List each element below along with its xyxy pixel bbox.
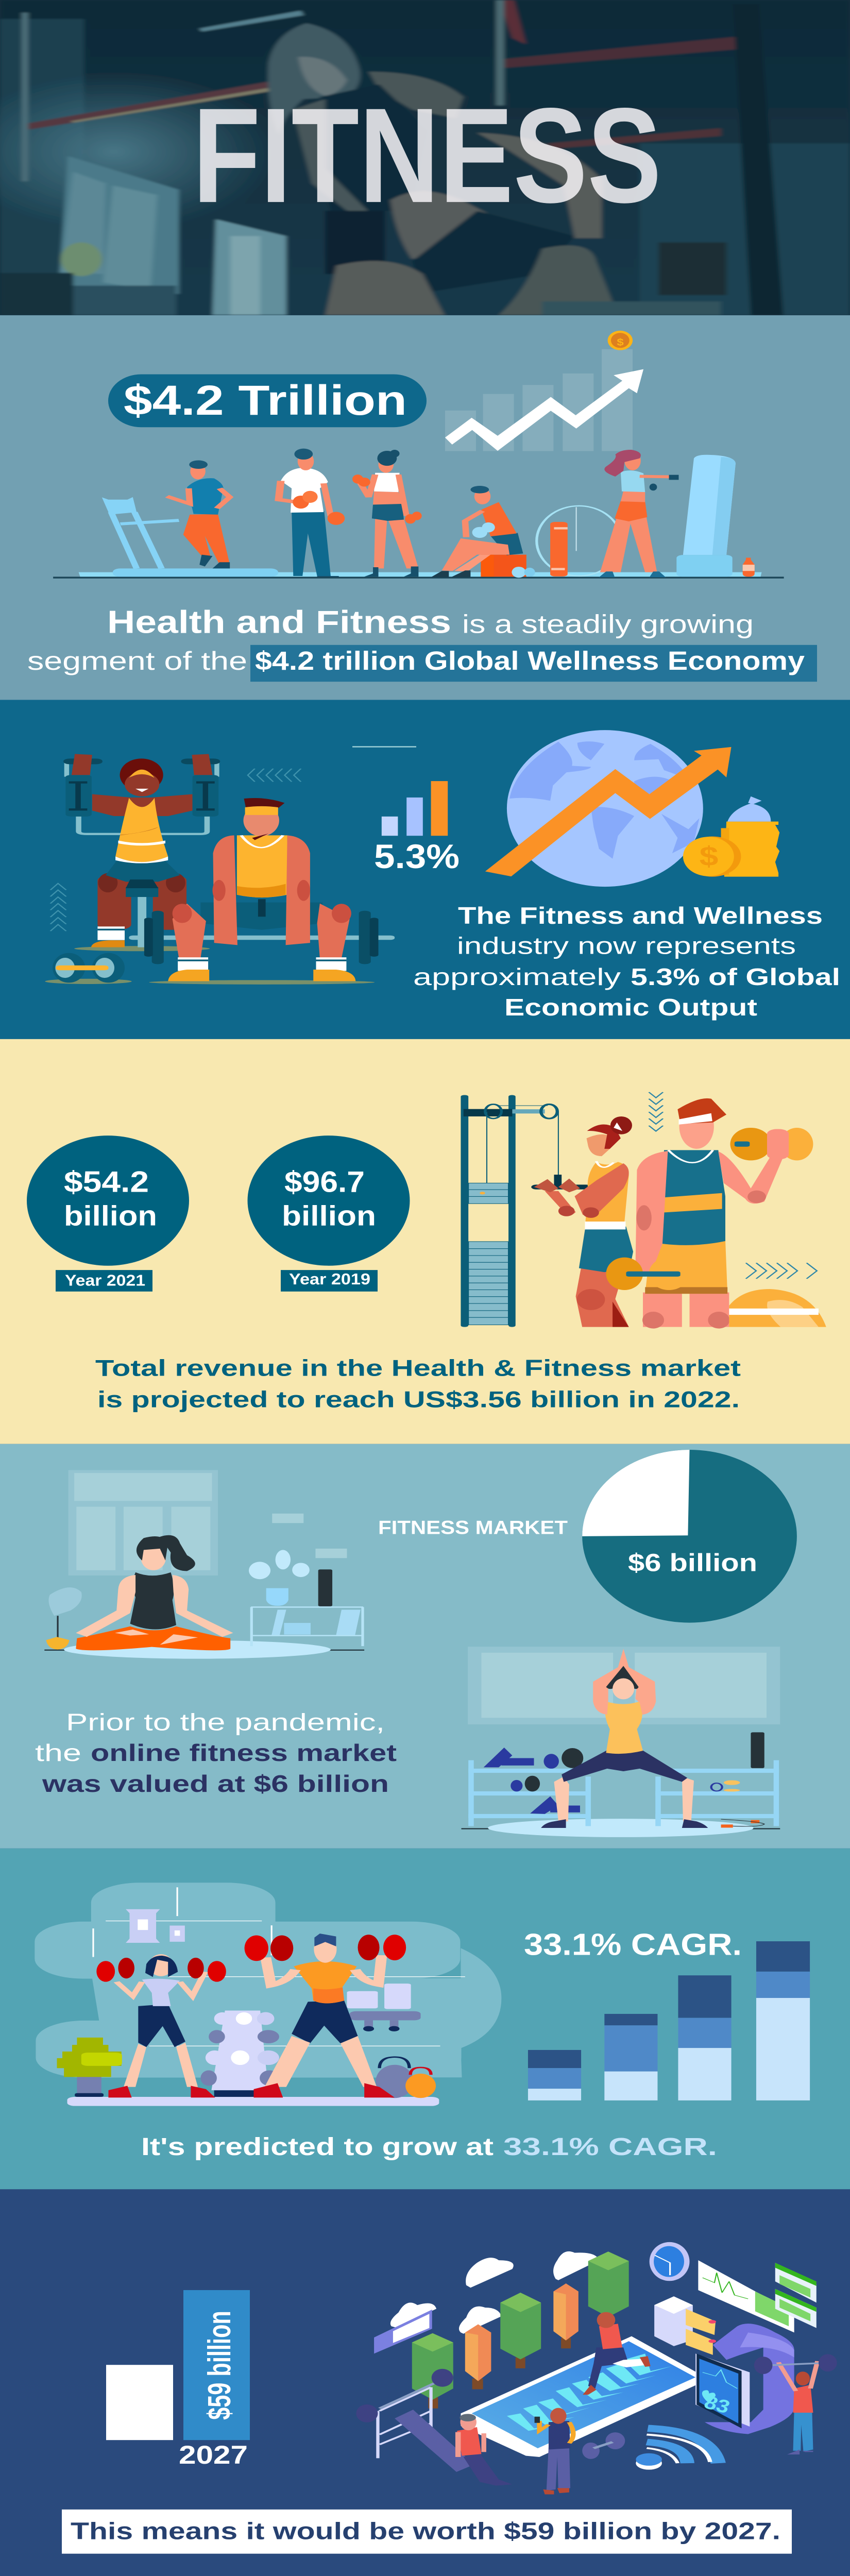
bar chart icon <box>382 781 448 836</box>
treadmill <box>111 512 179 568</box>
runner <box>183 514 230 565</box>
statement text: Economic Output <box>504 994 757 1021</box>
shelves <box>468 1760 779 1826</box>
statement text: approximately <box>413 963 621 990</box>
exercise ball <box>729 1289 826 1327</box>
bar: 59 billion in 2027 <box>183 2290 250 2440</box>
wifi symbol <box>647 2428 718 2463</box>
statement text <box>35 1709 397 1798</box>
statement banner: This means it would be worth $59 billion by 2027. <box>71 2518 780 2545</box>
illustration: people exercising in a gym <box>53 449 784 579</box>
runner <box>588 2347 628 2388</box>
small rule <box>352 746 416 748</box>
illustration: globe, arrow, coins <box>485 730 779 887</box>
woman <box>554 1776 569 1821</box>
statement text: The Fitness and Wellness <box>458 903 823 929</box>
floor <box>67 2097 439 2106</box>
standing man with phone <box>547 2447 570 2490</box>
bar: previous value <box>106 2365 173 2440</box>
woman with dumbbells <box>374 518 387 568</box>
panel: online fitness market before the pandemic <box>0 1444 850 1849</box>
panel: 59 billion by 2027 <box>0 2189 850 2576</box>
stat circle: 54.2 billion, year 2021: $54.2 <box>64 1165 149 1198</box>
man <box>477 133 602 238</box>
statement text: Total revenue in the Health & Fitness market <box>95 1355 741 1381</box>
smartwatch strap <box>705 2324 794 2434</box>
phone treadmill <box>461 2336 696 2457</box>
statement text: $4.2 trillion Global Wellness Economy <box>255 646 805 675</box>
pie chart: fitness market <box>582 1450 797 1623</box>
photo: gym background with two athletes <box>0 0 850 315</box>
dumbbell <box>582 2443 600 2459</box>
plant <box>77 2075 101 2094</box>
wall rack <box>347 1991 378 2008</box>
illustration: two athletes lifting weights <box>45 754 395 985</box>
bench press rack <box>378 2387 431 2458</box>
window panels <box>126 1909 160 1943</box>
bar: 59 billion in 2027: $59 billion <box>201 2311 237 2420</box>
illustration: growth chart with arrow and coin <box>445 331 643 451</box>
stat circle: 54.2 billion, year 2021 <box>27 1136 189 1292</box>
watch screen <box>695 2353 750 2427</box>
statement text: 5.3% of Global <box>631 963 840 990</box>
panel: 4.2 trillion wellness economy <box>0 315 850 700</box>
statement text: industry now represents <box>457 933 796 959</box>
woman <box>138 2004 185 2047</box>
stat: 5.3 percent: 5.3% <box>374 838 460 875</box>
chevrons decoration <box>50 769 301 931</box>
statement text: the <box>35 1739 81 1766</box>
icon: coin dollar sign: $ <box>700 841 718 872</box>
woman <box>576 1267 629 1327</box>
panel: hero photo with title <box>0 0 850 315</box>
woman on shoulder press <box>74 946 210 951</box>
stat circle: 96.7 billion, year 2019: Year 2019 <box>289 1271 370 1288</box>
man in white shirt <box>292 511 331 576</box>
stat circle: 54.2 billion, year 2021: billion <box>64 1200 157 1232</box>
statement text: 33.1% CAGR. <box>503 2132 717 2160</box>
stat circle: 54.2 billion, year 2021: Year 2021 <box>65 1272 145 1290</box>
icon: coin dollar: $ <box>617 336 624 348</box>
statement text: is projected to reach US$3.56 billion in 2022. <box>97 1386 740 1412</box>
statement text: is a steadily growing <box>462 609 754 638</box>
illustration: isometric fitness app with phone and exercisers <box>356 2242 837 2494</box>
statement text: was valued at $6 billion <box>42 1770 389 1798</box>
shelf <box>251 1607 363 1646</box>
panel: total revenue <box>0 1039 850 1444</box>
statement text <box>141 2132 717 2160</box>
kettlebells <box>380 2057 409 2068</box>
panel: 5.3 percent of global economic output <box>0 700 850 1039</box>
background cloud shape <box>35 1883 501 2078</box>
health monitor panels <box>698 2260 794 2332</box>
illustration: woman meditating <box>44 1470 364 1659</box>
statement text <box>413 903 840 1021</box>
punching bag <box>683 455 736 555</box>
statement text: It's predicted to grow at <box>141 2132 494 2160</box>
statement text: segment of the <box>27 647 247 675</box>
hoop and rolled mat <box>537 506 621 576</box>
man <box>643 1293 682 1327</box>
statement text <box>95 1355 741 1412</box>
illustration: gym with two people lifting dumbbells <box>35 1883 501 2106</box>
lifter <box>793 2411 813 2451</box>
clock <box>650 2242 690 2281</box>
cable machine <box>468 1183 508 1325</box>
statement banner <box>62 2510 792 2554</box>
panel: 33.1 percent CAGR <box>0 1849 850 2189</box>
year label: 2027 <box>179 2441 248 2469</box>
dumbbell on floor <box>53 953 85 982</box>
illustration: woman doing yoga squat in home gym <box>462 1647 780 1837</box>
statement text: online fitness market <box>91 1739 397 1766</box>
database and messages <box>654 2296 693 2346</box>
illustration: cable machine and two athletes <box>461 1092 826 1329</box>
woman <box>268 23 360 135</box>
trees <box>412 2251 629 2409</box>
wifi sign panel <box>374 2310 432 2353</box>
statement text: Health and Fitness <box>107 604 451 640</box>
dumbbell rack <box>214 2090 268 2097</box>
statement text <box>27 604 817 682</box>
barbell man <box>149 980 375 985</box>
stat circle: 96.7 billion, year 2019: billion <box>282 1200 376 1232</box>
statement text: Prior to the pandemic, <box>66 1709 385 1736</box>
seated man <box>481 555 526 577</box>
pie value: $6 billion <box>628 1549 757 1577</box>
value pill: $4.2 Trillion <box>124 377 407 424</box>
stacked bar chart <box>528 1941 810 2100</box>
dumbbells <box>730 1128 771 1160</box>
seated man <box>464 2453 512 2486</box>
woman <box>76 1626 230 1650</box>
stat circle: 96.7 billion, year 2019 <box>247 1136 410 1292</box>
icon: heart rate value: 83 <box>701 2392 733 2417</box>
chevrons <box>649 1092 817 1279</box>
label: 33.1 percent CAGR: 33.1% CAGR. <box>524 1928 742 1962</box>
stat circle: 96.7 billion, year 2019: $96.7 <box>284 1165 365 1198</box>
man <box>292 2001 358 2043</box>
label: fitness market: FITNESS MARKET <box>378 1517 568 1538</box>
boxing woman <box>600 518 632 572</box>
clouds <box>390 2251 599 2334</box>
